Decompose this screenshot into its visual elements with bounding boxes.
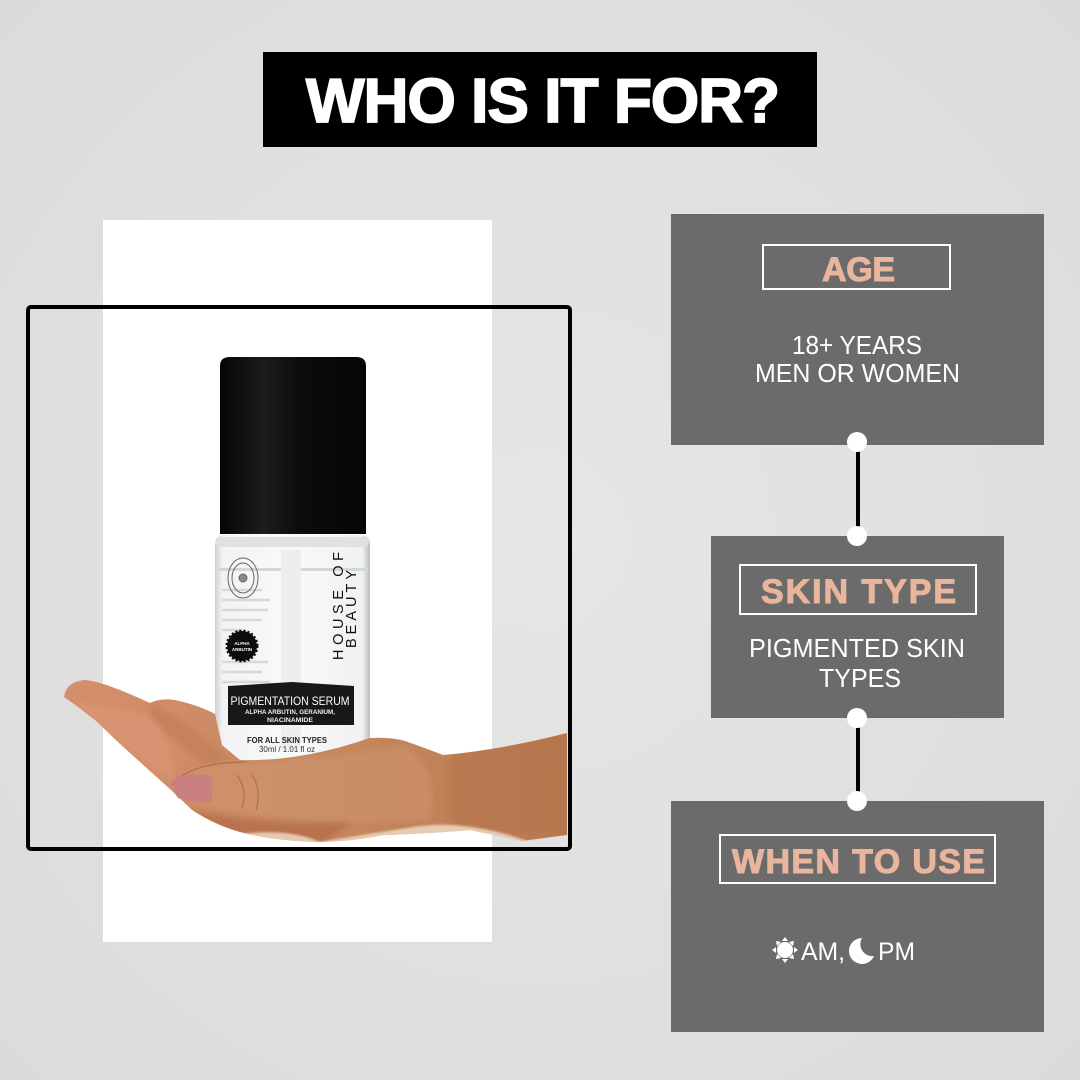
product label xyxy=(228,682,354,725)
product photo: serum bottle on hand xyxy=(64,357,567,850)
hand shading xyxy=(95,708,552,842)
black outline frame xyxy=(28,307,570,849)
faded back label text xyxy=(222,590,270,682)
age heading: AGE xyxy=(822,251,895,289)
palm and forearm xyxy=(64,680,567,842)
title banner xyxy=(263,52,817,147)
glass body xyxy=(215,535,370,762)
when to use heading: WHEN TO USE xyxy=(732,843,985,881)
panel: age xyxy=(671,214,1044,445)
glass shoulder highlight xyxy=(216,537,369,547)
badge: alpha arbutin xyxy=(227,631,257,661)
age text: 18+ YEARS xyxy=(792,330,922,360)
badge: alpha arbutin: ALPHA xyxy=(234,641,250,646)
brand name: BEAUTY xyxy=(344,570,360,648)
skin type text: PIGMENTED SKIN xyxy=(749,633,965,663)
icon: moon xyxy=(849,938,874,964)
product label: PIGMENTATION SERUM xyxy=(230,694,350,708)
age text: MEN OR WOMEN xyxy=(755,358,960,388)
volume line: 30ml / 1.01 fl oz xyxy=(259,745,315,754)
title banner: WHO IS IT FOR? xyxy=(306,67,780,136)
skin type text: TYPES xyxy=(819,663,901,693)
icon: hand xyxy=(64,680,567,850)
dip tube xyxy=(281,550,301,750)
icon: bottle xyxy=(215,357,370,762)
brand name xyxy=(331,552,360,660)
skin type heading: SKIN TYPE xyxy=(761,573,956,611)
product label: NIACINAMIDE xyxy=(267,717,314,724)
connector: skin type to when to use xyxy=(856,718,860,801)
white backdrop panel xyxy=(103,220,492,942)
am label: AM, xyxy=(801,938,845,966)
badge: alpha arbutin: ARBUTIN xyxy=(232,647,252,652)
age text xyxy=(755,330,960,388)
fingernail xyxy=(173,774,212,802)
pm label: PM xyxy=(878,938,915,966)
icon: sun xyxy=(772,937,798,963)
connector: age to skin type xyxy=(856,442,860,536)
panel: when to use xyxy=(671,801,1044,1032)
skin type heading xyxy=(740,565,976,614)
age heading xyxy=(763,245,950,289)
logo emblem xyxy=(228,558,258,598)
bottle cap xyxy=(220,357,366,534)
thumb crease xyxy=(172,762,258,810)
panel: skin type xyxy=(711,536,1004,718)
skin types line: FOR ALL SKIN TYPES xyxy=(247,736,328,745)
skin type text xyxy=(749,633,965,693)
liquid line xyxy=(218,568,368,571)
brand name: HOUSE OF xyxy=(331,552,347,660)
connector dots xyxy=(847,432,867,811)
product label: ALPHA ARBUTIN, GERANIUM, xyxy=(245,709,335,716)
